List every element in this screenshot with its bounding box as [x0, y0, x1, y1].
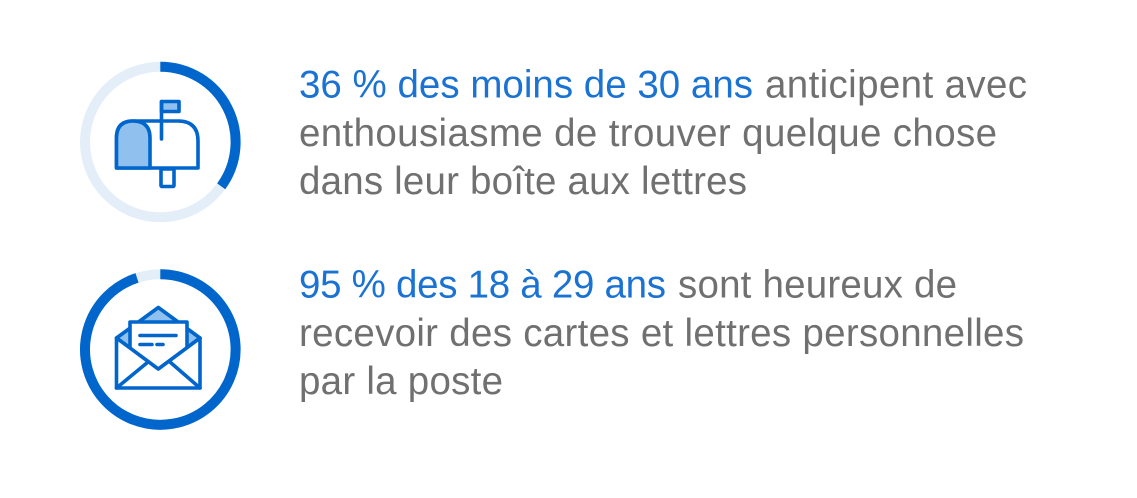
text block: mailbox statistic [299, 64, 1027, 203]
text block: letter statistic: par la poste [299, 360, 503, 403]
donut chart: 95 percent [85, 274, 236, 425]
donut chart: 36 percent [85, 67, 236, 217]
text block: mailbox statistic: dans leur boîte aux lettres [299, 160, 747, 203]
text block: letter statistic: recevoir des cartes et lettres personnelles [299, 312, 1024, 355]
text block: letter statistic: sont heureux de [678, 264, 957, 306]
icon: mailbox [116, 102, 198, 186]
text block: mailbox statistic: 36 % des moins de 30 ans [299, 64, 753, 106]
panel: mailbox statistic [85, 64, 1027, 217]
icon: open envelope with letter [116, 308, 200, 388]
text block: mailbox statistic: anticipent avec [765, 64, 1027, 106]
text block: mailbox statistic: enthousiasme de trouver quelque chose [299, 112, 997, 155]
panel: letter statistic [85, 264, 1024, 425]
text block: letter statistic [299, 264, 1024, 403]
text block: letter statistic: 95 % des 18 à 29 ans [299, 264, 666, 306]
